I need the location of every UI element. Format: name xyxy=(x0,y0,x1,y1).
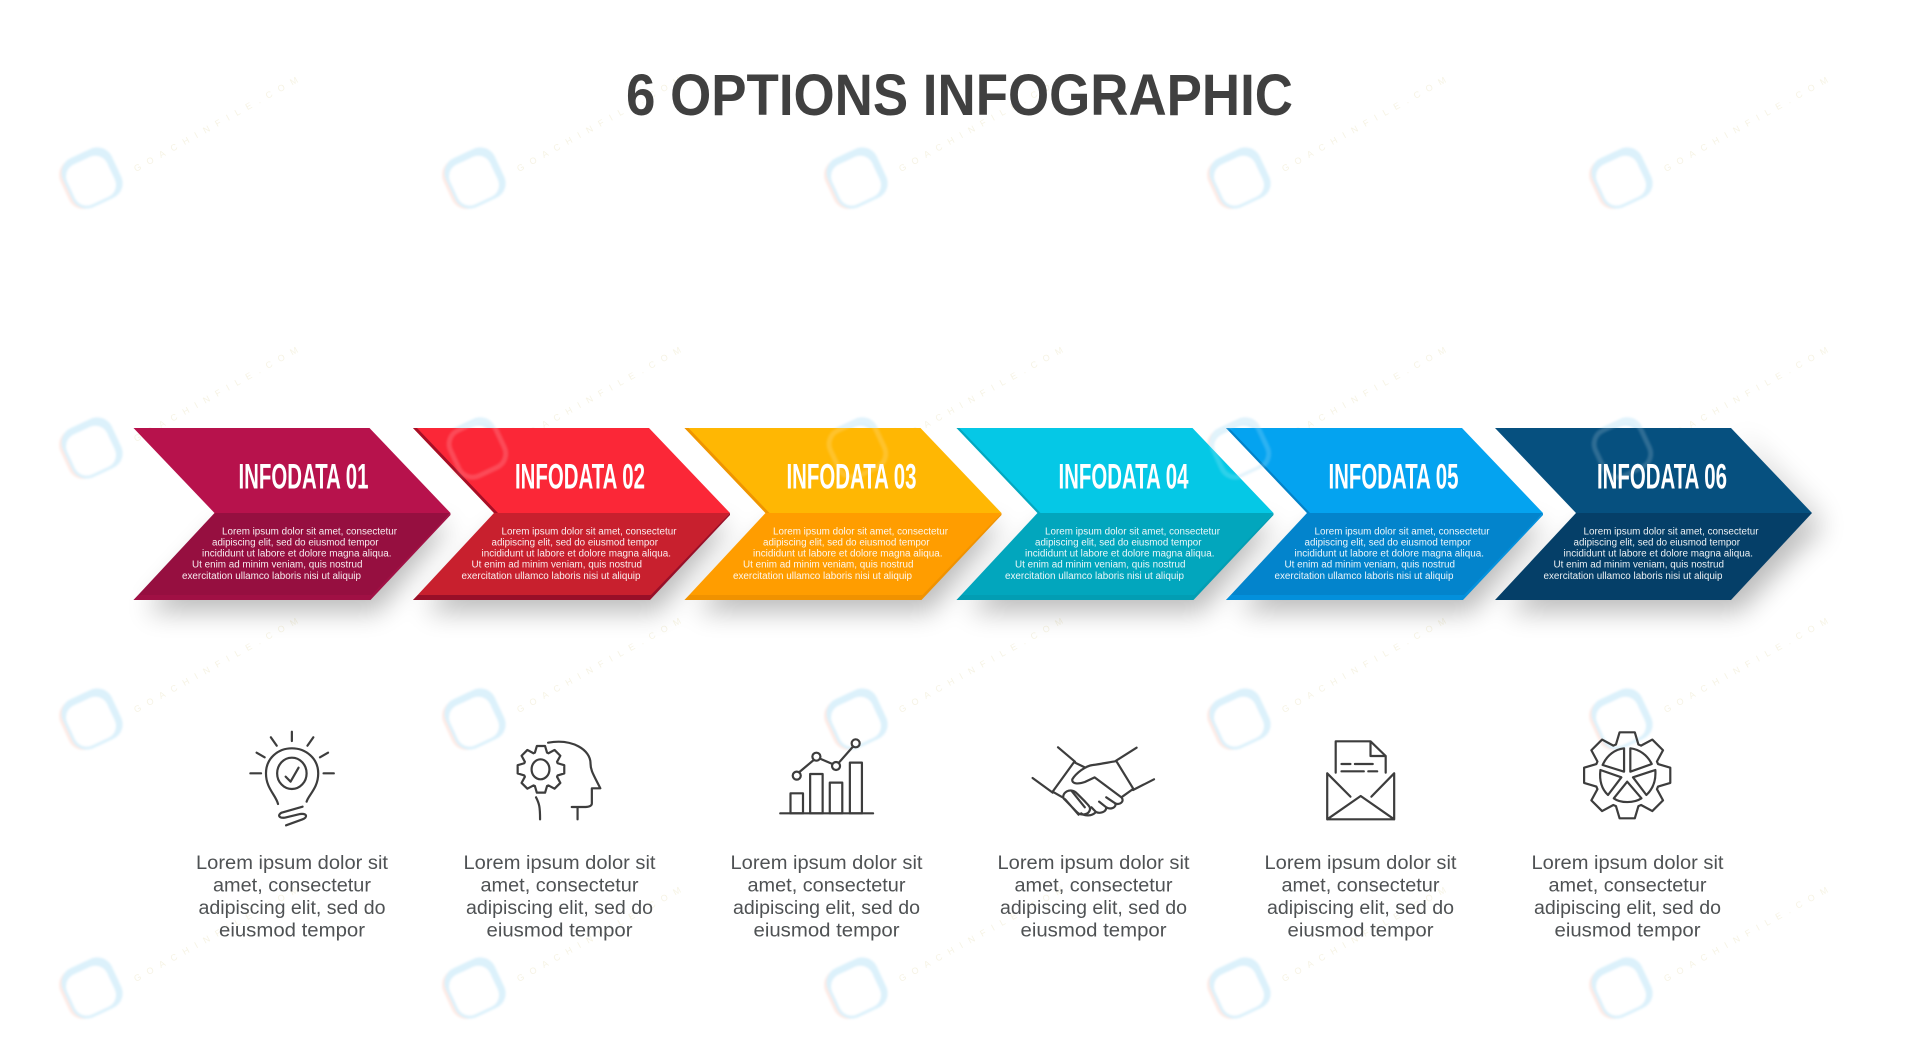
text block: infodata 06 xyxy=(1544,526,1759,582)
text block: option 5 xyxy=(1264,853,1457,942)
arrow: infodata 04 xyxy=(956,428,1274,600)
text block: option 2 xyxy=(464,853,656,942)
text block: option 4: amet, consectetur xyxy=(1014,876,1173,896)
text block: infodata 02: exercitation ullamco laboris nisi ut aliquip xyxy=(462,571,641,582)
arrow: infodata 02 xyxy=(413,428,730,600)
text block: option 4: Lorem ipsum dolor sit xyxy=(998,853,1190,874)
text block: option 1: amet, consectetur xyxy=(213,876,372,896)
arrow shadows xyxy=(150,432,1822,612)
text block: option 1: adipiscing elit, sed do xyxy=(198,898,386,919)
text block: option 3: Lorem ipsum dolor sit xyxy=(730,853,923,874)
icon: gear with segments xyxy=(1584,732,1670,818)
title: 6 OPTIONS INFOGRAPHIC xyxy=(626,63,1293,128)
text block: option 1 xyxy=(196,853,389,942)
text block: option 2: adipiscing elit, sed do xyxy=(466,898,653,919)
text block: option 5: amet, consectetur xyxy=(1282,876,1440,896)
text block: option 5: Lorem ipsum dolor sit xyxy=(1264,853,1457,874)
text block: option 2: eiusmod tempor xyxy=(486,920,633,942)
text block: infodata 04 xyxy=(1005,526,1221,582)
icon: handshake xyxy=(1033,747,1154,815)
text block: infodata 03: incididunt ut labore et dolore magna aliqua. xyxy=(753,549,942,560)
text block: infodata 06: Lorem ipsum dolor sit amet, consectetur xyxy=(1584,526,1759,538)
text block: option 2: amet, consectetur xyxy=(480,876,639,896)
text block: infodata 01: exercitation ullamco laboris nisi ut aliquip xyxy=(182,571,361,582)
text block: option 6: amet, consectetur xyxy=(1548,876,1707,896)
text block: infodata 03: adipiscing elit, sed do eiusmod tempor xyxy=(763,538,930,548)
text block: infodata 04: Lorem ipsum dolor sit amet, consectetur xyxy=(1045,526,1221,538)
text block: infodata 04: exercitation ullamco laboris nisi ut aliquip xyxy=(1005,571,1184,582)
text block: infodata 02: adipiscing elit, sed do eiusmod tempor xyxy=(492,538,659,548)
text block: infodata 01: Lorem ipsum dolor sit amet, consectetur xyxy=(222,526,398,538)
text block: option 4: adipiscing elit, sed do xyxy=(1000,898,1187,919)
text block: infodata 01 xyxy=(182,526,398,582)
arrow: infodata 06 xyxy=(1495,428,1812,600)
text block: infodata 06: Ut enim ad minim veniam, quis nostrud xyxy=(1554,560,1724,571)
text block: option 6: eiusmod tempor xyxy=(1554,920,1701,942)
text block: infodata 02: incididunt ut labore et dolore magna aliqua. xyxy=(482,549,671,560)
text block: infodata 05: Ut enim ad minim veniam, quis nostrud xyxy=(1284,560,1455,571)
heading: infodata 02: INFODATA 02 xyxy=(515,458,645,496)
text block: option 2: Lorem ipsum dolor sit xyxy=(464,853,656,874)
text block: option 1: Lorem ipsum dolor sit xyxy=(196,853,389,874)
watermark overlay on arrows xyxy=(444,416,1656,482)
text block: option 3 xyxy=(730,853,923,942)
arrow: infodata 03 xyxy=(684,428,1002,600)
text block: infodata 03: Lorem ipsum dolor sit amet, consectetur xyxy=(773,526,949,538)
text block: infodata 03 xyxy=(733,526,949,582)
text block: infodata 06: adipiscing elit, sed do eiusmod tempor xyxy=(1574,538,1741,548)
heading: infodata 01: INFODATA 01 xyxy=(238,458,368,496)
text block: infodata 02: Lorem ipsum dolor sit amet, consectetur xyxy=(502,526,677,538)
text block: option 3: adipiscing elit, sed do xyxy=(733,898,920,919)
text block: infodata 01: adipiscing elit, sed do eiusmod tempor xyxy=(212,538,379,548)
icon: bar chart with trend line xyxy=(780,739,873,813)
heading: infodata 04: INFODATA 04 xyxy=(1058,458,1189,496)
text block: infodata 06: exercitation ullamco laboris nisi ut aliquip xyxy=(1544,571,1723,582)
text block: option 3: eiusmod tempor xyxy=(754,920,900,942)
heading: infodata 06: INFODATA 06 xyxy=(1597,458,1727,496)
text block: option 3: amet, consectetur xyxy=(748,876,906,896)
icon: head with gear xyxy=(518,742,600,819)
text block: option 6 xyxy=(1532,853,1724,942)
arrow: infodata 01 xyxy=(134,428,450,600)
heading: infodata 05: INFODATA 05 xyxy=(1328,458,1458,496)
text block: infodata 02: Ut enim ad minim veniam, quis nostrud xyxy=(472,560,642,571)
text block: infodata 02 xyxy=(462,526,677,582)
text block: infodata 01: incididunt ut labore et dolore magna aliqua. xyxy=(202,549,392,560)
text block: option 5: eiusmod tempor xyxy=(1288,920,1434,942)
heading: infodata 03: INFODATA 03 xyxy=(786,458,916,496)
text block: option 1: eiusmod tempor xyxy=(219,920,366,942)
text block: option 4: eiusmod tempor xyxy=(1020,920,1167,942)
icon: envelope with document xyxy=(1327,741,1394,819)
text block: infodata 05 xyxy=(1274,526,1490,582)
text block: infodata 03: Ut enim ad minim veniam, quis nostrud xyxy=(743,560,914,571)
icon: light bulb xyxy=(250,732,334,825)
text block: infodata 06: incididunt ut labore et dolore magna aliqua. xyxy=(1564,549,1753,560)
text block: infodata 05: exercitation ullamco laboris nisi ut aliquip xyxy=(1274,571,1454,582)
text block: option 5: adipiscing elit, sed do xyxy=(1267,898,1454,919)
text block: infodata 04: incididunt ut labore et dolore magna aliqua. xyxy=(1025,549,1214,560)
text block: option 4 xyxy=(998,853,1190,942)
text block: infodata 05: adipiscing elit, sed do eiusmod tempor xyxy=(1304,538,1472,548)
text block: infodata 04: Ut enim ad minim veniam, quis nostrud xyxy=(1015,560,1186,571)
text block: infodata 03: exercitation ullamco laboris nisi ut aliquip xyxy=(733,571,912,582)
arrow: infodata 05 xyxy=(1226,428,1543,600)
text block: infodata 04: adipiscing elit, sed do eiusmod tempor xyxy=(1035,538,1202,548)
text block: infodata 05: incididunt ut labore et dolore magna aliqua. xyxy=(1294,549,1484,560)
text block: infodata 01: Ut enim ad minim veniam, quis nostrud xyxy=(192,560,362,571)
text block: option 6: adipiscing elit, sed do xyxy=(1534,898,1721,919)
text block: option 6: Lorem ipsum dolor sit xyxy=(1532,853,1724,874)
text block: infodata 05: Lorem ipsum dolor sit amet, consectetur xyxy=(1314,526,1490,538)
